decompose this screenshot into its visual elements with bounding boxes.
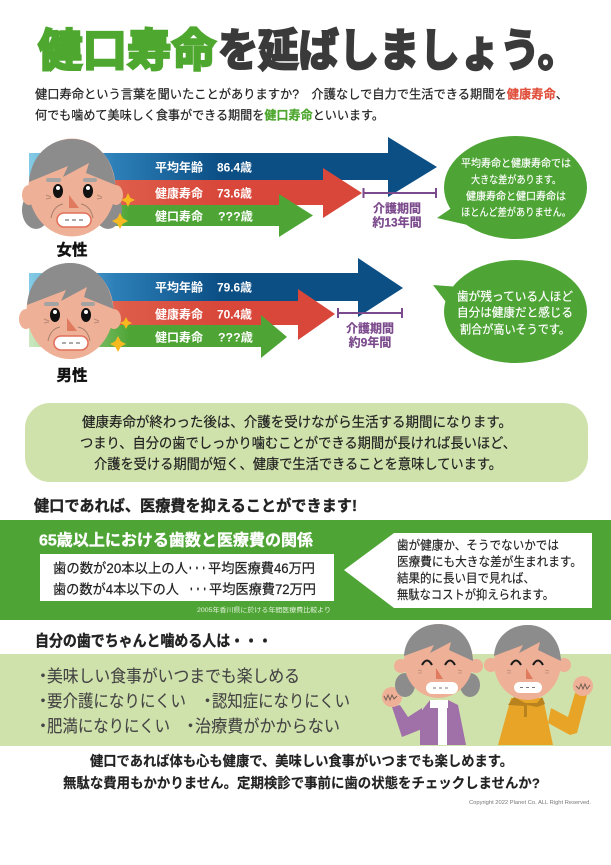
callout: male comparison (433, 260, 587, 363)
benefits list: 治療費がかからない (195, 717, 340, 736)
label: female: 女性 (56, 240, 88, 259)
care period marker male: 介護期間 (346, 322, 394, 336)
icon: sparkles female (112, 193, 135, 229)
callout: cost explanation: 歯が健康か、そうでないかでは (397, 538, 559, 552)
bar labels female: 健康寿命 (155, 186, 203, 200)
benefits list: 要介護になりにくい (47, 692, 186, 711)
closing message (63, 753, 540, 791)
panel: explanation: 健康寿命が終わった後は、介護を受けながら生活する期間になります。 (82, 414, 512, 430)
cost table: 平均医療費72万円 (209, 582, 316, 597)
care period marker female: 約13年間 (372, 214, 422, 230)
callout: female comparison: 健康寿命と健口寿命は (466, 190, 566, 203)
callout: male comparison: 歯が残っている人ほど (457, 288, 573, 303)
title: を延ばしましょう。 (218, 25, 578, 76)
bar labels female: 健口寿命 (155, 208, 203, 224)
bar labels male: 70.4歳 (217, 308, 252, 322)
bar labels female: 73.6歳 (217, 186, 252, 200)
icon: sparkles male (110, 317, 132, 352)
callout: cost explanation (344, 533, 592, 608)
source note: 2005年香川県に於ける年間医療費比較より (197, 605, 331, 614)
callout: male comparison: 自分は健康だと感じる (457, 304, 573, 320)
care period marker female: 介護期間 (373, 202, 421, 216)
benefits list: 肥満になりにくい (47, 717, 170, 736)
intro text: 何でも噛めて美味しく食事ができる期間を健口寿命といいます。 (35, 108, 384, 122)
heading: people who can chew: 自分の歯でちゃんと噛める人は・・・ (35, 631, 272, 650)
cost table (40, 554, 334, 601)
female lifespan arrows (29, 137, 437, 237)
bar labels male: 健康寿命 (155, 306, 203, 322)
subheading: 65歳以上における歯数と医療費の関係 (39, 530, 313, 550)
bar labels female: ???歳 (218, 210, 253, 224)
label: male: 男性 (56, 366, 88, 384)
callout: female comparison: 平均寿命と健康寿命では (461, 157, 571, 170)
cost table: 歯の数が20本以上の人 (53, 561, 188, 576)
body (420, 700, 466, 745)
title (38, 25, 578, 76)
callout: cost explanation: 医療費にも大きな差が生まれます。 (397, 554, 582, 569)
care period marker male (338, 308, 402, 350)
callout: male comparison: 割合が高いそうです。 (460, 322, 570, 336)
care period marker female (364, 188, 436, 230)
bar labels male (155, 280, 253, 344)
benefits list: ・ (199, 692, 216, 711)
panel: explanation (25, 403, 588, 482)
intro text: 健口寿命という言葉を聞いたことがありますか? 介護なしで自力で生活できる期間を健康寿命、 (35, 86, 568, 102)
cost table: 歯の数が4本以下の人 (53, 582, 179, 597)
arrow: dental lifespan female (100, 194, 313, 237)
cost table: ・・・ (188, 582, 208, 597)
callout: female comparison (437, 136, 587, 239)
bar labels female (155, 160, 253, 224)
copyright: Copyright 2022 Planet Co. ALL Right Reserved. (469, 800, 591, 806)
arrow: healthy lifespan male (29, 289, 335, 340)
closing message: 無駄な費用もかかりません。定期検診で事前に歯の状態をチェックしませんか? (63, 775, 540, 791)
heading: medical costs: 健口であれば、医療費を抑えることができます! (34, 496, 357, 515)
callout: cost explanation: 無駄なコストが抑えられます。 (397, 587, 554, 602)
benefits list: ・ (182, 717, 199, 736)
benefits list: ・ (34, 717, 52, 736)
bar labels male: 平均年齢 (155, 280, 203, 294)
cost table: 平均医療費46万円 (208, 561, 315, 576)
illustration: smiling woman (382, 624, 483, 745)
head (484, 658, 498, 672)
head (395, 673, 415, 697)
male lifespan arrows (29, 258, 403, 358)
body (498, 698, 553, 745)
face: elderly woman (22, 138, 123, 236)
callout: female comparison: ほとんど差がありません。 (461, 206, 571, 219)
bar labels male: 79.6歳 (217, 280, 252, 294)
closing message: 健口であれば体も心も健康で、美味しい食事がいつまでも楽しめます。 (90, 753, 513, 769)
illustration: smiling man (484, 625, 593, 745)
arrow: healthy lifespan female (29, 168, 362, 218)
benefits list: 認知症になりにくい (212, 692, 350, 711)
fist (382, 687, 402, 707)
panel: explanation: つまり、自分の歯でしっかり噛むことができる期間が長ければ長いほど、 (80, 435, 516, 451)
benefits list: 美味しい食事がいつまでも楽しめる (47, 667, 300, 686)
cost table: ・・・ (187, 561, 207, 576)
arrow: average lifespan male (29, 258, 403, 317)
arrow: dental lifespan male (29, 315, 287, 358)
panel: explanation: 介護を受ける期間が短く、健康で生活できることを意味しています。 (94, 456, 502, 472)
care period marker male: 約9年間 (349, 334, 391, 350)
panel: medical cost band (0, 520, 611, 620)
intro text (35, 86, 568, 122)
face: elderly man (19, 263, 121, 359)
bar labels female: 平均年齢 (155, 160, 203, 174)
callout: female comparison: 大きな差があります。 (471, 173, 561, 186)
bar labels male: 健口寿命 (155, 330, 203, 344)
title: 健口寿命 (38, 25, 216, 76)
benefits list: ・ (34, 692, 52, 711)
fist (573, 676, 593, 696)
bar labels male: ???歳 (218, 330, 253, 344)
benefits list (34, 667, 350, 736)
arrow: average lifespan female (29, 137, 437, 197)
callout: cost explanation: 結果的に長い目で見れば、 (397, 570, 535, 586)
bar labels female: 86.4歳 (217, 160, 252, 174)
panel: benefits band (0, 654, 611, 746)
benefits list: ・ (34, 667, 52, 686)
